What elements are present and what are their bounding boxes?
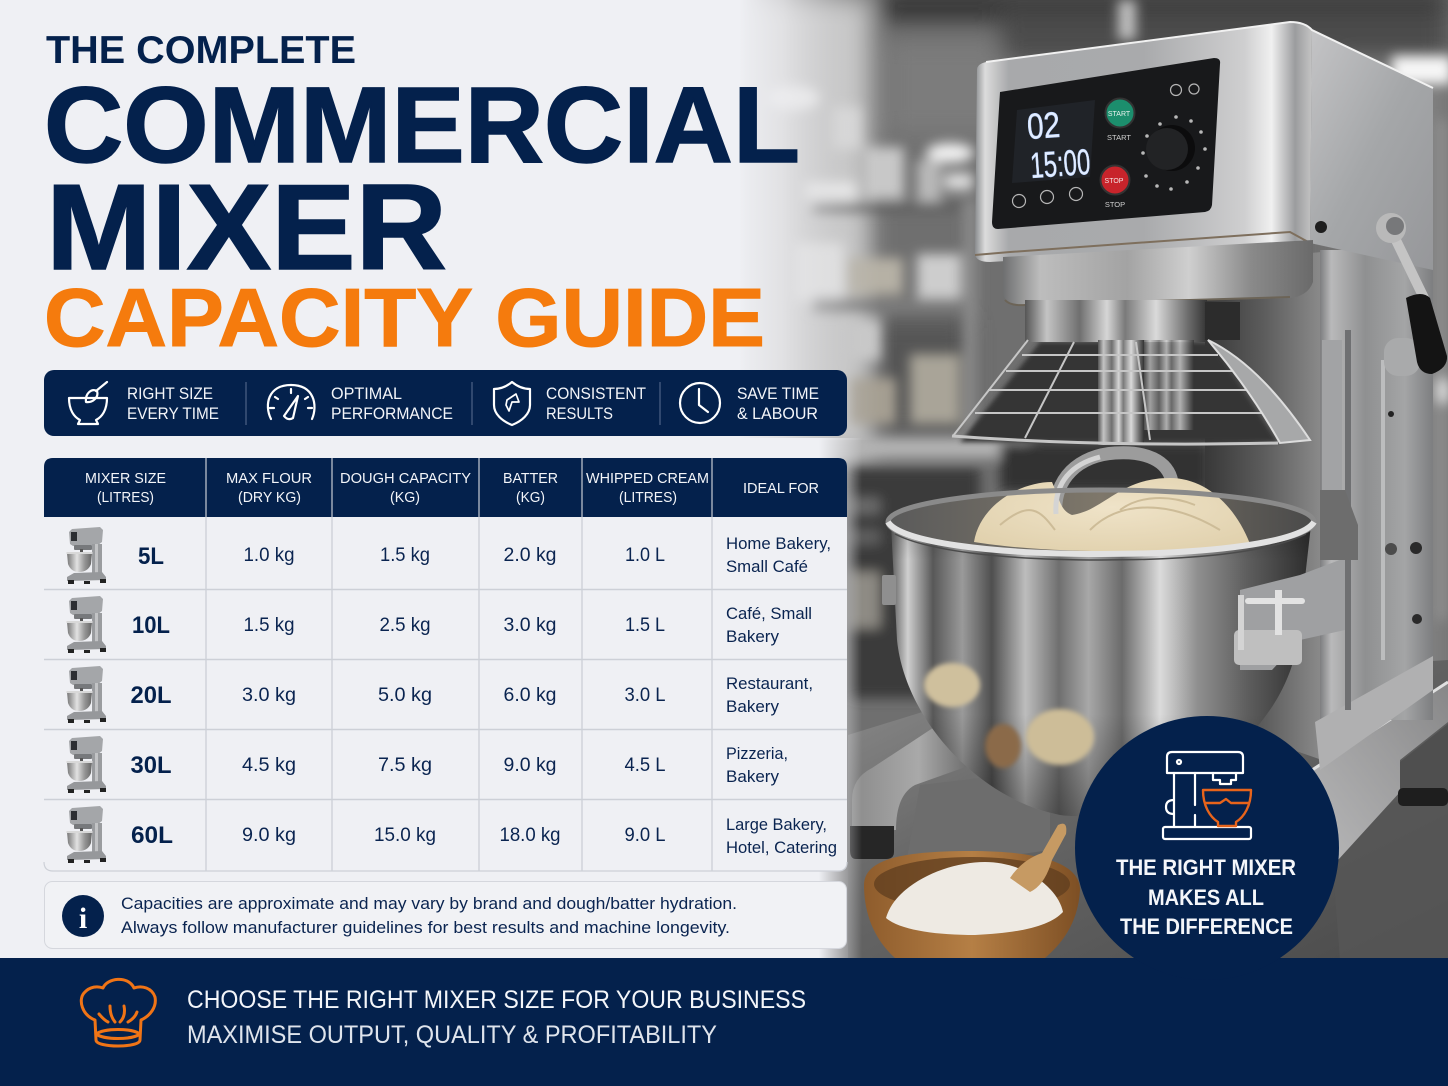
row: 30L: 30L [130, 752, 172, 779]
icon: info [62, 895, 104, 937]
row: 10L: Café, Small [726, 605, 812, 623]
row: 60L: 9.0 kg [242, 825, 296, 846]
row: 60L: 15.0 kg [374, 825, 436, 846]
benefit: consistent results [546, 385, 646, 423]
row: 20L: 3.0 kg [242, 685, 296, 706]
row: 30L: 7.5 kg [378, 755, 432, 776]
row: 30L: Bakery [726, 768, 780, 786]
icon: chef hat [81, 979, 155, 1046]
title line: MIXER: MIXER [46, 159, 447, 295]
control panel: 02 [1026, 104, 1061, 147]
shaft under guard [1098, 340, 1194, 445]
bowl clamp [1234, 490, 1358, 670]
footer band [0, 958, 1448, 1086]
table header: (LITRES) [97, 489, 154, 506]
footer text: CHOOSE THE RIGHT MIXER SIZE FOR YOUR BUSINESS [187, 986, 806, 1014]
background photo: blurred kitchen shelves [740, 0, 1448, 960]
row: 5L: 1.5 kg [380, 545, 430, 566]
icon: gauge [268, 385, 314, 419]
table header [85, 470, 819, 506]
row: 20L: Bakery [726, 698, 780, 716]
bowl rim [888, 490, 1314, 560]
benefit: save time and labour: SAVE TIME [737, 385, 819, 403]
footer text: MAXIMISE OUTPUT, QUALITY & PROFITABILITY [187, 1021, 717, 1049]
title line: COMMERCIAL: COMMERCIAL [44, 64, 800, 185]
benefit: right size every time: EVERY TIME [127, 405, 219, 423]
table header: MAX FLOUR [226, 470, 312, 487]
dough hook and bowl inside [889, 453, 1313, 554]
icon: clock [680, 383, 720, 423]
row: 5L: 5L [138, 543, 164, 570]
callout text: MAKES ALL [1148, 885, 1264, 910]
note text [121, 894, 737, 937]
table header: WHIPPED CREAM [586, 470, 709, 487]
row: 10L [66, 596, 812, 653]
row: 30L: 4.5 L [624, 755, 666, 776]
icon: bowl with whisk [69, 382, 107, 424]
callout text [1116, 855, 1296, 939]
row: 60L: 60L [131, 822, 173, 849]
row: 10L: 2.5 kg [380, 615, 430, 636]
table header: DOUGH CAPACITY [340, 470, 471, 487]
steel bowl body [882, 525, 1311, 816]
title [44, 29, 800, 364]
row: 20L: 3.0 L [624, 685, 666, 706]
row: 5L: 1.0 kg [244, 545, 294, 566]
row: 60L: Large Bakery, [726, 816, 827, 834]
table header: (LITRES) [619, 489, 677, 506]
row: 20L [66, 666, 813, 723]
mixer base and legs [850, 682, 1448, 870]
row: 30L: 4.5 kg [242, 755, 296, 776]
row: 5L [66, 527, 831, 584]
row: 30L [66, 736, 788, 793]
table header: IDEAL FOR [743, 480, 819, 497]
callout circle [1075, 716, 1339, 980]
table header: (DRY KG) [238, 489, 301, 506]
row: 5L: 1.0 L [625, 545, 665, 566]
footer text [187, 986, 806, 1049]
crank handle [1376, 213, 1447, 376]
row: 20L: 6.0 kg [504, 685, 556, 706]
row: 5L: 2.0 kg [504, 545, 556, 566]
row: 10L: 3.0 kg [504, 615, 556, 636]
benefit: consistent results: CONSISTENT [546, 385, 646, 403]
benefits bar [44, 370, 847, 436]
control panel: STOP [1105, 178, 1124, 185]
row: 30L: 9.0 kg [504, 755, 556, 776]
benefit: optimal performance: PERFORMANCE [331, 405, 453, 423]
table header: MIXER SIZE [85, 470, 166, 487]
row: 60L: Hotel, Catering [726, 839, 837, 857]
row: 10L: 1.5 kg [244, 615, 294, 636]
benefit: save time and labour [737, 385, 819, 423]
row: 60L: 9.0 L [624, 825, 666, 846]
left light panel fade [0, 0, 880, 960]
benefit: save time and labour: & LABOUR [737, 405, 818, 423]
table header: BATTER [503, 470, 558, 487]
row: 20L: 5.0 kg [378, 685, 432, 706]
title line: THE COMPLETE: THE COMPLETE [46, 29, 356, 72]
kitchen counter [848, 660, 1448, 960]
row: 5L: Home Bakery, [726, 535, 831, 553]
control panel: START [1108, 111, 1131, 118]
benefit: optimal performance [331, 385, 453, 423]
note text: Always follow manufacturer guidelines for best results and machine longevity. [121, 918, 730, 937]
row: 20L: 20L [130, 682, 172, 709]
wire safety guard [952, 340, 1310, 444]
row: 10L: 1.5 L [625, 615, 665, 636]
row: 30L: Pizzeria, [726, 745, 788, 763]
benefit: optimal performance: OPTIMAL [331, 385, 402, 403]
mixer collar and planetary ring [960, 240, 1313, 442]
control panel: STOP [1105, 200, 1125, 209]
title line: CAPACITY GUIDE: CAPACITY GUIDE [44, 271, 765, 364]
mixer column [1205, 250, 1433, 770]
icon: shield [494, 382, 530, 425]
table header: (KG) [390, 489, 420, 506]
row: 10L: Bakery [726, 628, 780, 646]
note text: Capacities are approximate and may vary by brand and dough/batter hydration. [121, 894, 737, 913]
mixer photo: machine [850, 22, 1448, 870]
benefit: consistent results: RESULTS [546, 405, 613, 423]
table header: (KG) [516, 489, 545, 506]
row: 60L [66, 806, 837, 863]
row: 60L: 18.0 kg [500, 825, 560, 846]
row: 20L: Restaurant, [726, 675, 813, 693]
mixer head [975, 22, 1433, 270]
callout text: THE DIFFERENCE [1120, 914, 1293, 939]
control panel: START [1107, 133, 1131, 142]
control panel [992, 58, 1220, 229]
benefit: right size every time [127, 385, 219, 423]
control panel: 15:00 [1029, 141, 1092, 186]
row: 10L: 10L [132, 612, 170, 639]
icon: info: i [79, 902, 87, 935]
icon: stand mixer [1163, 752, 1251, 839]
row: 5L: Small Café [726, 558, 808, 576]
flour bowl with wooden scoop [864, 824, 1080, 958]
callout text: THE RIGHT MIXER [1116, 855, 1296, 880]
note box [44, 882, 846, 948]
capacity table [44, 458, 847, 871]
benefit: right size every time: RIGHT SIZE [127, 385, 213, 403]
